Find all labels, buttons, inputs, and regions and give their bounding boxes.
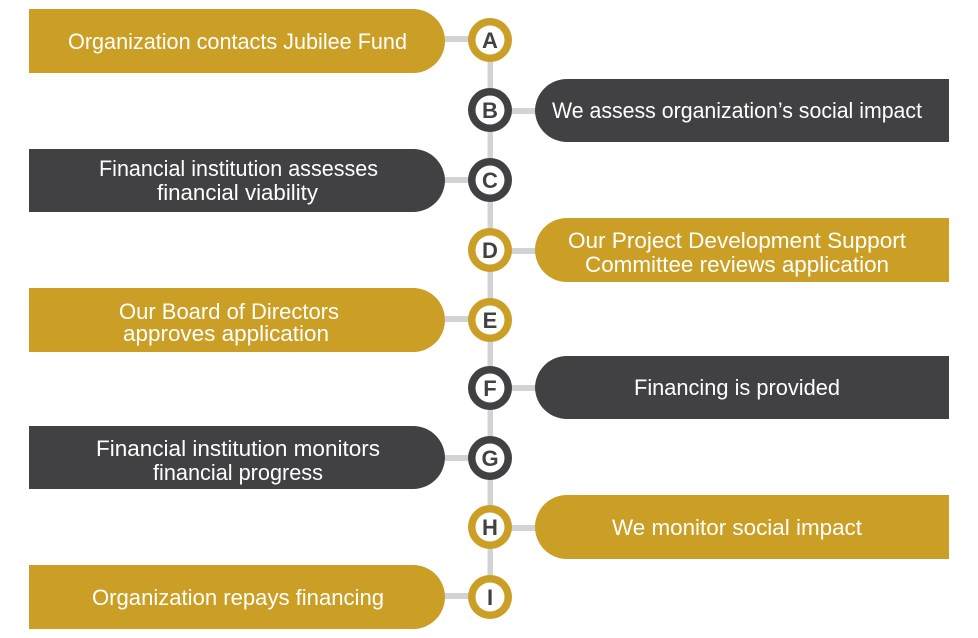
step B badge xyxy=(468,88,512,132)
step C text: financial viability xyxy=(157,180,319,205)
step A badge xyxy=(468,18,512,62)
step E text xyxy=(119,299,339,346)
step B pill xyxy=(535,79,949,142)
step E xyxy=(29,288,512,352)
step H pill xyxy=(535,495,949,559)
step C xyxy=(29,149,512,212)
step F badge xyxy=(468,366,512,410)
step D xyxy=(468,218,949,282)
step G text: Financial institution monitors xyxy=(96,436,380,461)
step G badge: G xyxy=(481,446,499,471)
step A pill xyxy=(29,9,445,73)
step E badge: E xyxy=(483,308,497,333)
step I text: Organization repays financing xyxy=(92,585,384,610)
step B text: We assess organization’s social impact xyxy=(552,98,923,123)
step E badge xyxy=(468,298,512,342)
step I badge xyxy=(468,575,512,619)
step C badge xyxy=(468,158,512,202)
step D badge xyxy=(468,228,512,272)
step A xyxy=(29,9,512,73)
step A badge: A xyxy=(482,28,498,53)
step D text xyxy=(568,228,907,277)
step F text: Financing is provided xyxy=(634,375,840,400)
step G badge xyxy=(468,436,512,480)
step E text: approves application xyxy=(123,321,329,346)
step H badge xyxy=(468,505,512,549)
step A text: Organization contacts Jubilee Fund xyxy=(68,29,407,54)
step G xyxy=(29,426,512,489)
step B badge: B xyxy=(482,98,498,123)
step D text: Committee reviews application xyxy=(585,252,889,277)
step H badge: H xyxy=(482,515,498,540)
step C pill xyxy=(29,149,445,212)
step I badge: I xyxy=(487,585,493,610)
step E pill xyxy=(29,288,445,352)
step F pill xyxy=(535,356,949,419)
step H xyxy=(468,495,949,559)
step I xyxy=(29,565,512,629)
step B xyxy=(468,79,949,142)
step I pill xyxy=(29,565,445,629)
step D badge: D xyxy=(482,238,498,263)
step C text: Financial institution assesses xyxy=(99,156,378,181)
step C badge: C xyxy=(482,168,498,193)
step D pill xyxy=(535,218,949,282)
step E text: Our Board of Directors xyxy=(119,299,339,324)
step F badge: F xyxy=(483,376,497,401)
step C text xyxy=(99,156,378,205)
step F xyxy=(468,356,949,419)
step G pill xyxy=(29,426,445,489)
step D text: Our Project Development Support xyxy=(568,228,907,253)
step G text xyxy=(96,436,380,485)
step G text: financial progress xyxy=(153,460,323,485)
step H text: We monitor social impact xyxy=(612,515,863,540)
